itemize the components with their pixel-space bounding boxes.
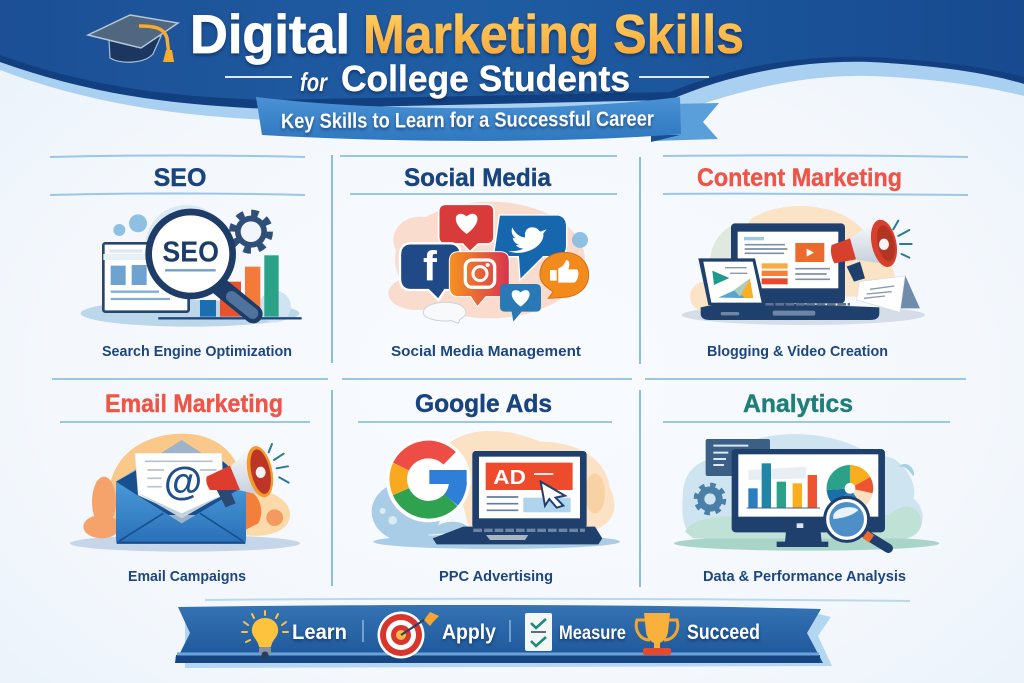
subtitle: College Students (341, 58, 630, 99)
icon: trophy (636, 613, 678, 655)
heading: Content Marketing (697, 164, 902, 192)
icon: envelope and megaphone (70, 434, 300, 552)
icon: light bulb (242, 611, 288, 658)
ribbon text: Key Skills to Learn for a Successful Career (281, 108, 654, 133)
header band (0, 0, 1024, 120)
icon: laptop and megaphone (682, 206, 925, 325)
panel: Analytics (674, 390, 939, 585)
heading: Google Ads (415, 390, 552, 418)
ribbon (256, 97, 719, 142)
icon: monitor and charts (674, 434, 939, 551)
icon: Google logo and laptop: AD (493, 466, 526, 489)
panel: Google Ads (372, 390, 620, 585)
caption: Data & Performance Analysis (703, 568, 906, 585)
panel: SEO (81, 164, 302, 360)
icon: Google logo and laptop (372, 431, 620, 549)
label: Succeed: Succeed (687, 621, 760, 644)
subtitle: for (300, 67, 328, 97)
label: Measure: Measure (559, 623, 626, 644)
caption: Search Engine Optimization (102, 343, 292, 360)
icon: graduation cap (88, 15, 178, 62)
title: Marketing Skills (363, 3, 744, 65)
panel: Social Media (388, 164, 589, 360)
icon: SEO magnifier (81, 205, 302, 327)
heading: Social Media (404, 164, 552, 192)
label: Learn: Learn (292, 621, 347, 644)
caption: Social Media Management (391, 343, 581, 360)
title (190, 3, 744, 65)
footer banner (175, 605, 832, 668)
icon: social bubbles: f (423, 243, 437, 290)
icon: SEO magnifier: SEO (162, 237, 219, 269)
icon: social bubbles (388, 202, 589, 323)
caption: PPC Advertising (439, 568, 553, 585)
heading: Email Marketing (105, 390, 283, 418)
caption: Blogging & Video Creation (707, 343, 888, 360)
heading: SEO (154, 164, 206, 192)
icon: envelope and megaphone: @ (164, 459, 202, 503)
label: Apply: Apply (442, 621, 496, 644)
caption: Email Campaigns (128, 568, 246, 585)
icon: checklist (525, 613, 552, 651)
heading: Analytics (743, 390, 853, 418)
panel: Content Marketing (682, 164, 925, 360)
title: Digital (190, 3, 350, 65)
icon: target (378, 612, 439, 658)
panel: Email Marketing (70, 390, 300, 585)
